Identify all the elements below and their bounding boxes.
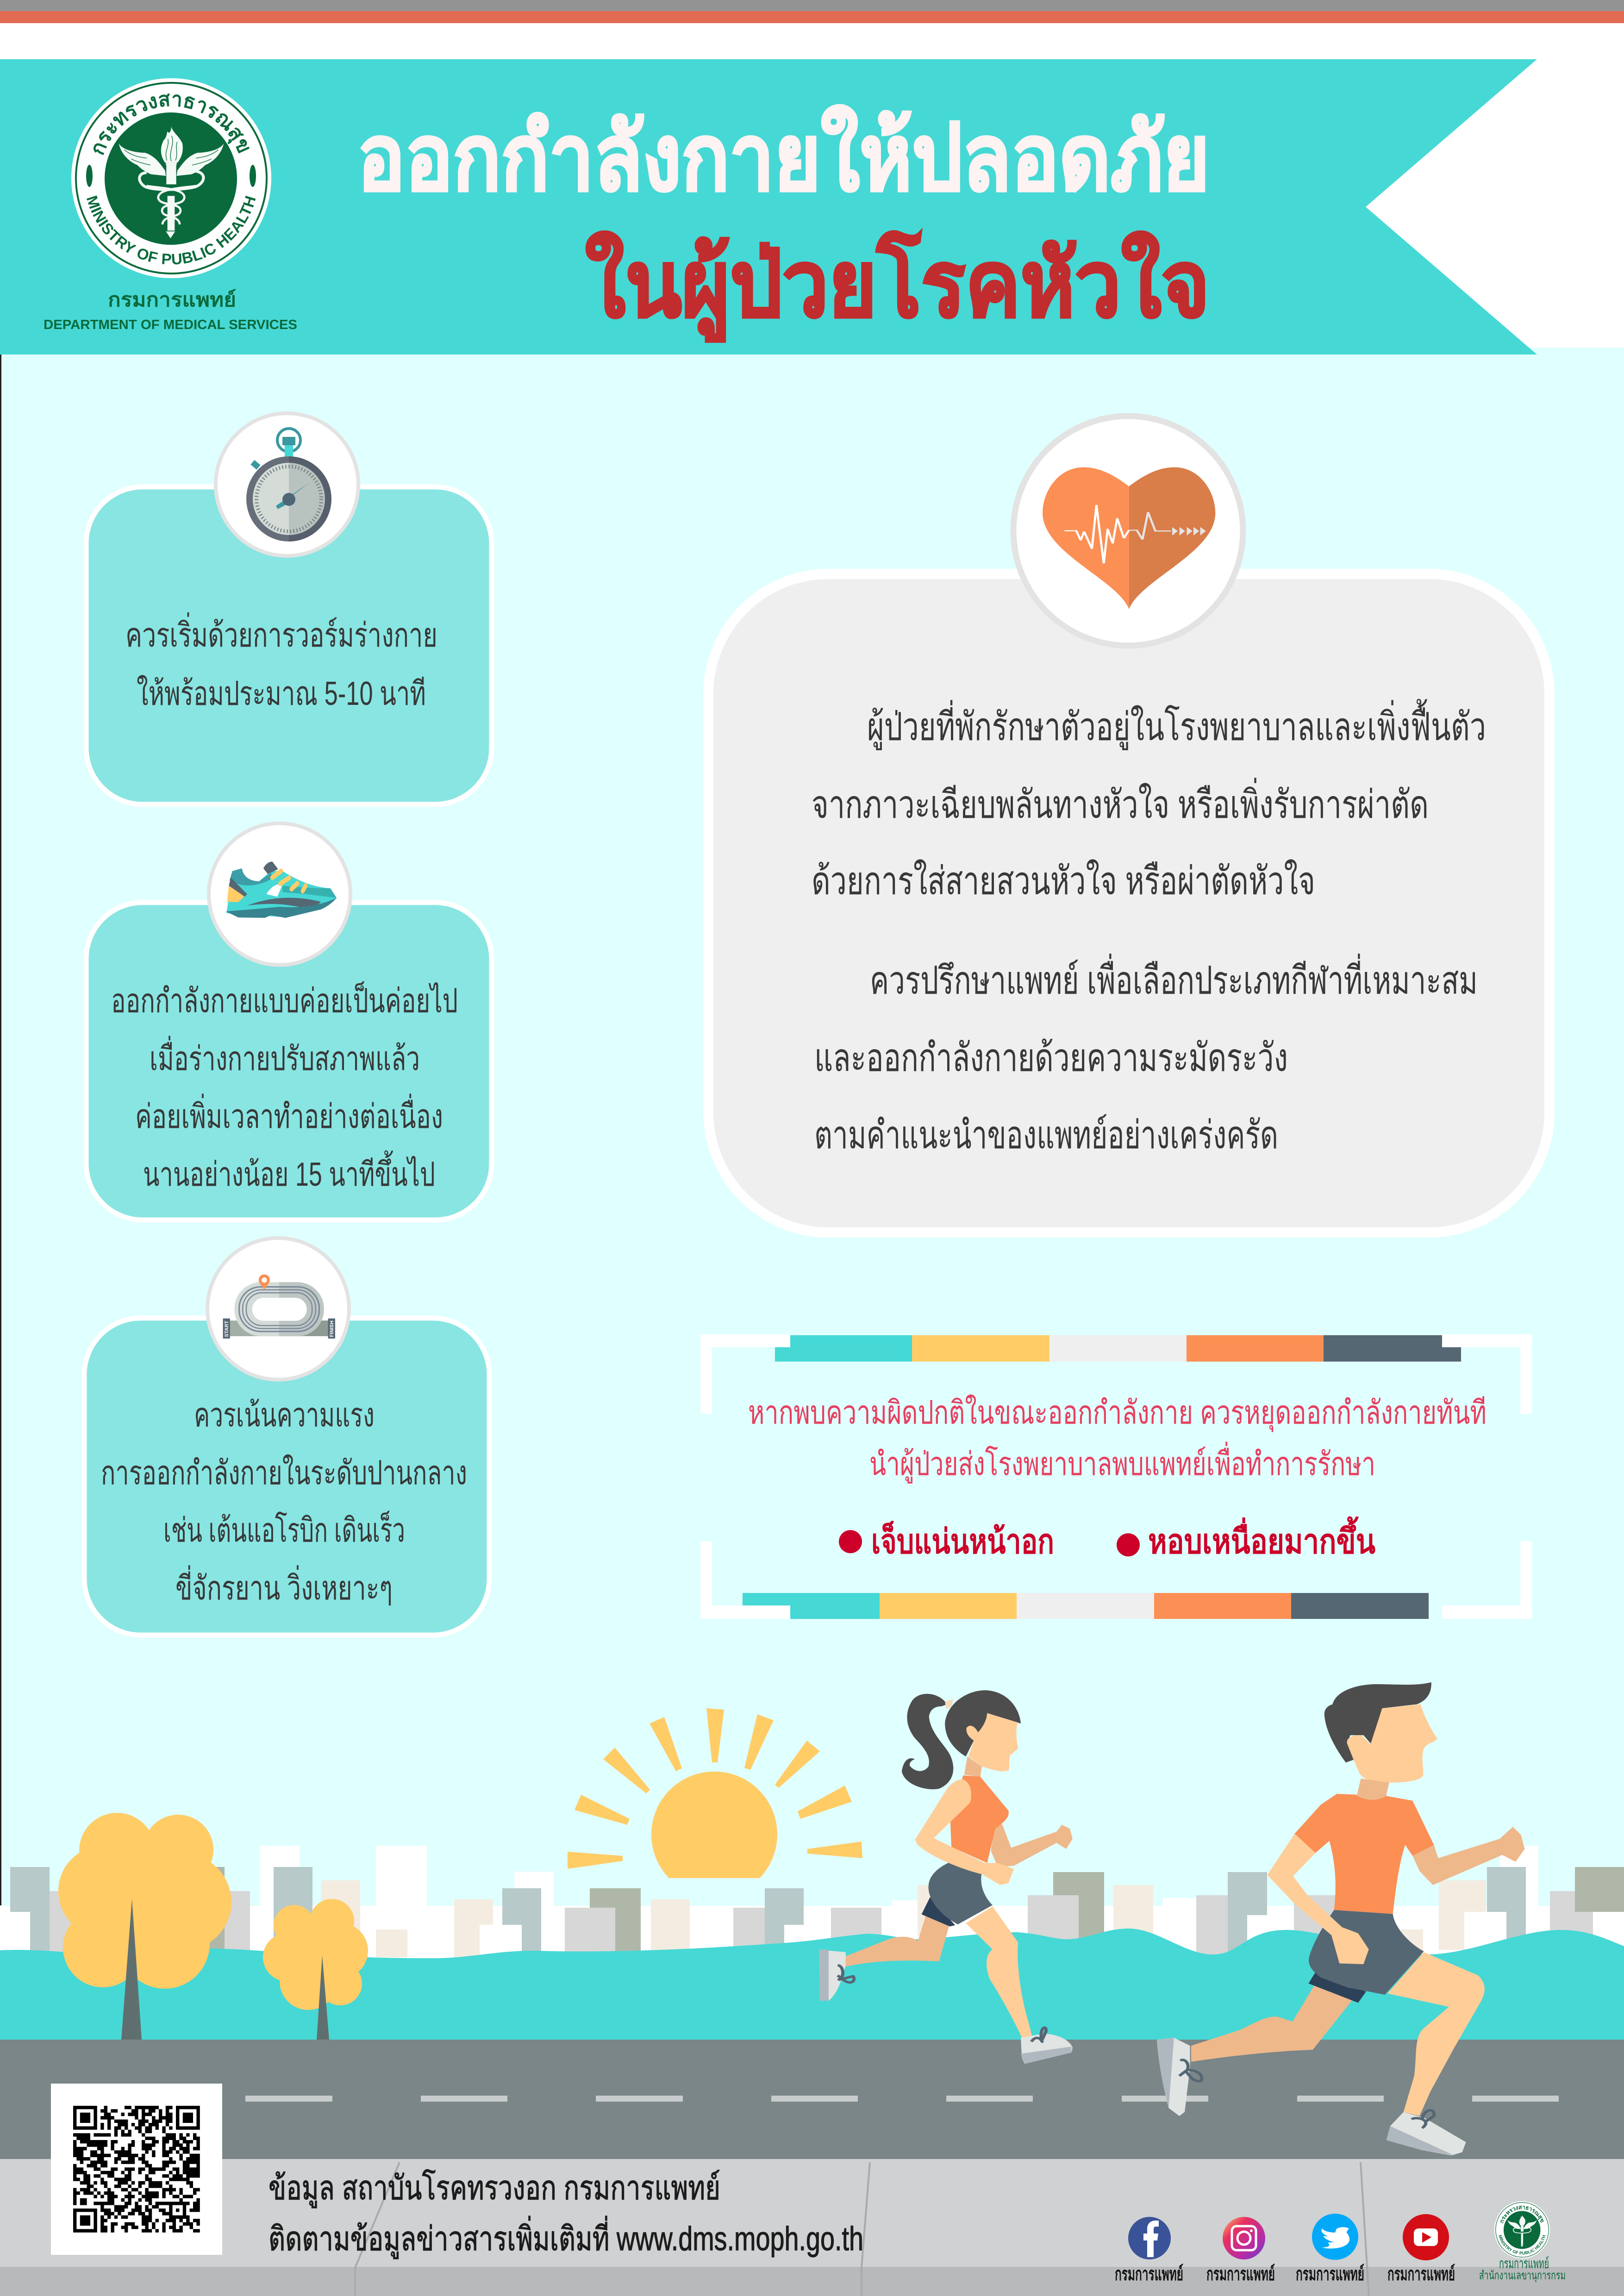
illustration: woman runner <box>819 1690 1073 2064</box>
road <box>0 2040 1624 2159</box>
illustration: large tree <box>58 1813 231 2040</box>
small ministry logo with caption: MINISTRY OF PUBLIC HEALTH <box>1498 2234 1547 2256</box>
intensity text <box>101 1397 467 1607</box>
top colour strip <box>0 0 1624 23</box>
title line 2: ในผู้ป่วยโรคหัวใจ <box>585 230 1210 342</box>
footer source text: ติดตามข้อมูลข่าวสารเพิ่มเติมที่ www.dms.moph.go.th <box>269 2216 863 2259</box>
bottom colour bar <box>743 1593 1429 1619</box>
icon: running track: FINISH <box>329 1320 335 1337</box>
small ministry logo with caption: กระทรวงสาธารณสุข <box>1499 2204 1546 2224</box>
gradual exercise text: ออกกำลังกายแบบค่อยเป็นค่อยไป <box>111 981 458 1020</box>
icon: facebook: กรมการแพทย์ <box>1115 2264 1183 2284</box>
advice paragraph 2: และออกกำลังกายด้วยความระมัดระวัง <box>814 1036 1288 1079</box>
advice paragraph 1: ด้วยการใส่สายสวนหัวใจ หรือผ่าตัดหัวใจ <box>812 859 1315 902</box>
advice paragraph 2: ตามคำแนะนำของแพทย์อย่างเคร่งครัด <box>814 1113 1278 1157</box>
footer source text <box>269 2169 863 2259</box>
icon: twitter: กรมการแพทย์ <box>1296 2264 1364 2284</box>
advice paragraph 1 <box>812 699 1486 902</box>
advice paragraph 1: จากภาวะเฉียบพลันทางหัวใจ หรือเพิ่งรับการผ่าตัด <box>812 778 1429 826</box>
warning text <box>748 1394 1487 1484</box>
gradual exercise text: เมื่อร่างกายปรับสภาพแล้ว <box>150 1036 420 1077</box>
small ministry logo with caption: กรมการแพทย์ <box>1499 2256 1549 2271</box>
logo caption: department of medical services: กรมการแพทย์ <box>108 289 236 311</box>
logo caption: department of medical services: DEPARTMENT OF MEDICAL SERVICES <box>44 317 297 332</box>
icon: running track: START <box>224 1320 230 1337</box>
logo caption: department of medical services <box>44 289 297 332</box>
illustration: small tree <box>263 1899 368 2040</box>
symptom: chest tightness <box>839 1521 1054 1561</box>
icon: stopwatch <box>216 413 358 556</box>
illustration: man runner <box>1157 1682 1524 2155</box>
panel: gradual exercise card <box>86 823 492 1220</box>
warm-up text <box>125 612 437 712</box>
illustration: sun <box>568 1708 862 1878</box>
warm-up text: ควรเริ่มด้วยการวอร์มร่างกาย <box>125 612 437 654</box>
small ministry logo with caption <box>1479 2201 1566 2283</box>
intensity text: ขี่จักรยาน วิ่งเหยาะๆ <box>175 1565 393 1607</box>
logo: ministry of public health seal: กระทรวงสาธารณสุข <box>86 88 256 158</box>
warm-up text: ให้พร้อมประมาณ 5-10 นาที <box>137 675 426 712</box>
intensity text: เช่น เต้นแอโรบิก เดินเร็ว <box>163 1511 405 1549</box>
warning text: นำผู้ป่วยส่งโรงพยาบาลพบแพทย์เพื่อทำการรักษา <box>869 1442 1375 1484</box>
intensity text: การออกกำลังกายในระดับปานกลาง <box>101 1454 467 1492</box>
title line 1: ออกกำลังกายให้ปลอดภัย <box>357 105 1210 210</box>
icon: running track <box>207 1238 349 1380</box>
icon: facebook <box>1115 2217 1183 2284</box>
panel: main advice <box>708 416 1549 1232</box>
icon: instagram <box>1206 2217 1275 2284</box>
symptom: chest tightness: เจ็บแน่นหน้าอก <box>871 1521 1054 1561</box>
panel: warm-up card <box>86 413 492 804</box>
white corner brackets <box>700 1334 1532 1619</box>
logo: ministry of public health seal <box>71 78 271 278</box>
advice paragraph 2 <box>814 953 1478 1157</box>
gradual exercise text: ค่อยเพิ่มเวลาทำอย่างต่อเนื่อง <box>135 1094 443 1135</box>
icon: twitter <box>1296 2214 1364 2284</box>
panel: warning box <box>700 1334 1532 1619</box>
gradual exercise text <box>111 981 458 1193</box>
symptom: shortness of breath: หอบเหนื่อยมากขึ้น <box>1148 1516 1375 1561</box>
panel: intensity card <box>84 1238 489 1635</box>
icon: running shoe <box>209 823 350 965</box>
small ministry logo with caption: สำนักงานเลขานุการกรม <box>1479 2268 1566 2283</box>
gradual exercise text: นานอย่างน้อย 15 นาทีขึ้นไป <box>143 1150 435 1193</box>
illustration: teal hills <box>0 1929 1624 2040</box>
footer source text: ข้อมูล สถาบันโรคทรวงอก กรมการแพทย์ <box>269 2169 720 2208</box>
symptom: shortness of breath <box>1117 1516 1375 1561</box>
icon: heart with pulse <box>1013 416 1243 646</box>
icon: instagram: กรมการแพทย์ <box>1206 2264 1275 2284</box>
illustration: city skyline <box>0 1846 1624 1998</box>
icon: youtube <box>1387 2214 1455 2284</box>
title banner <box>0 59 1537 355</box>
logo: ministry of public health seal: MINISTRY OF PUBLIC HEALTH <box>83 193 259 268</box>
QR code <box>51 2084 222 2255</box>
icon: youtube: กรมการแพทย์ <box>1387 2264 1455 2284</box>
top colour bar <box>775 1335 1461 1362</box>
intensity text: ควรเน้นความแรง <box>194 1397 375 1434</box>
pavement <box>0 2159 1624 2296</box>
